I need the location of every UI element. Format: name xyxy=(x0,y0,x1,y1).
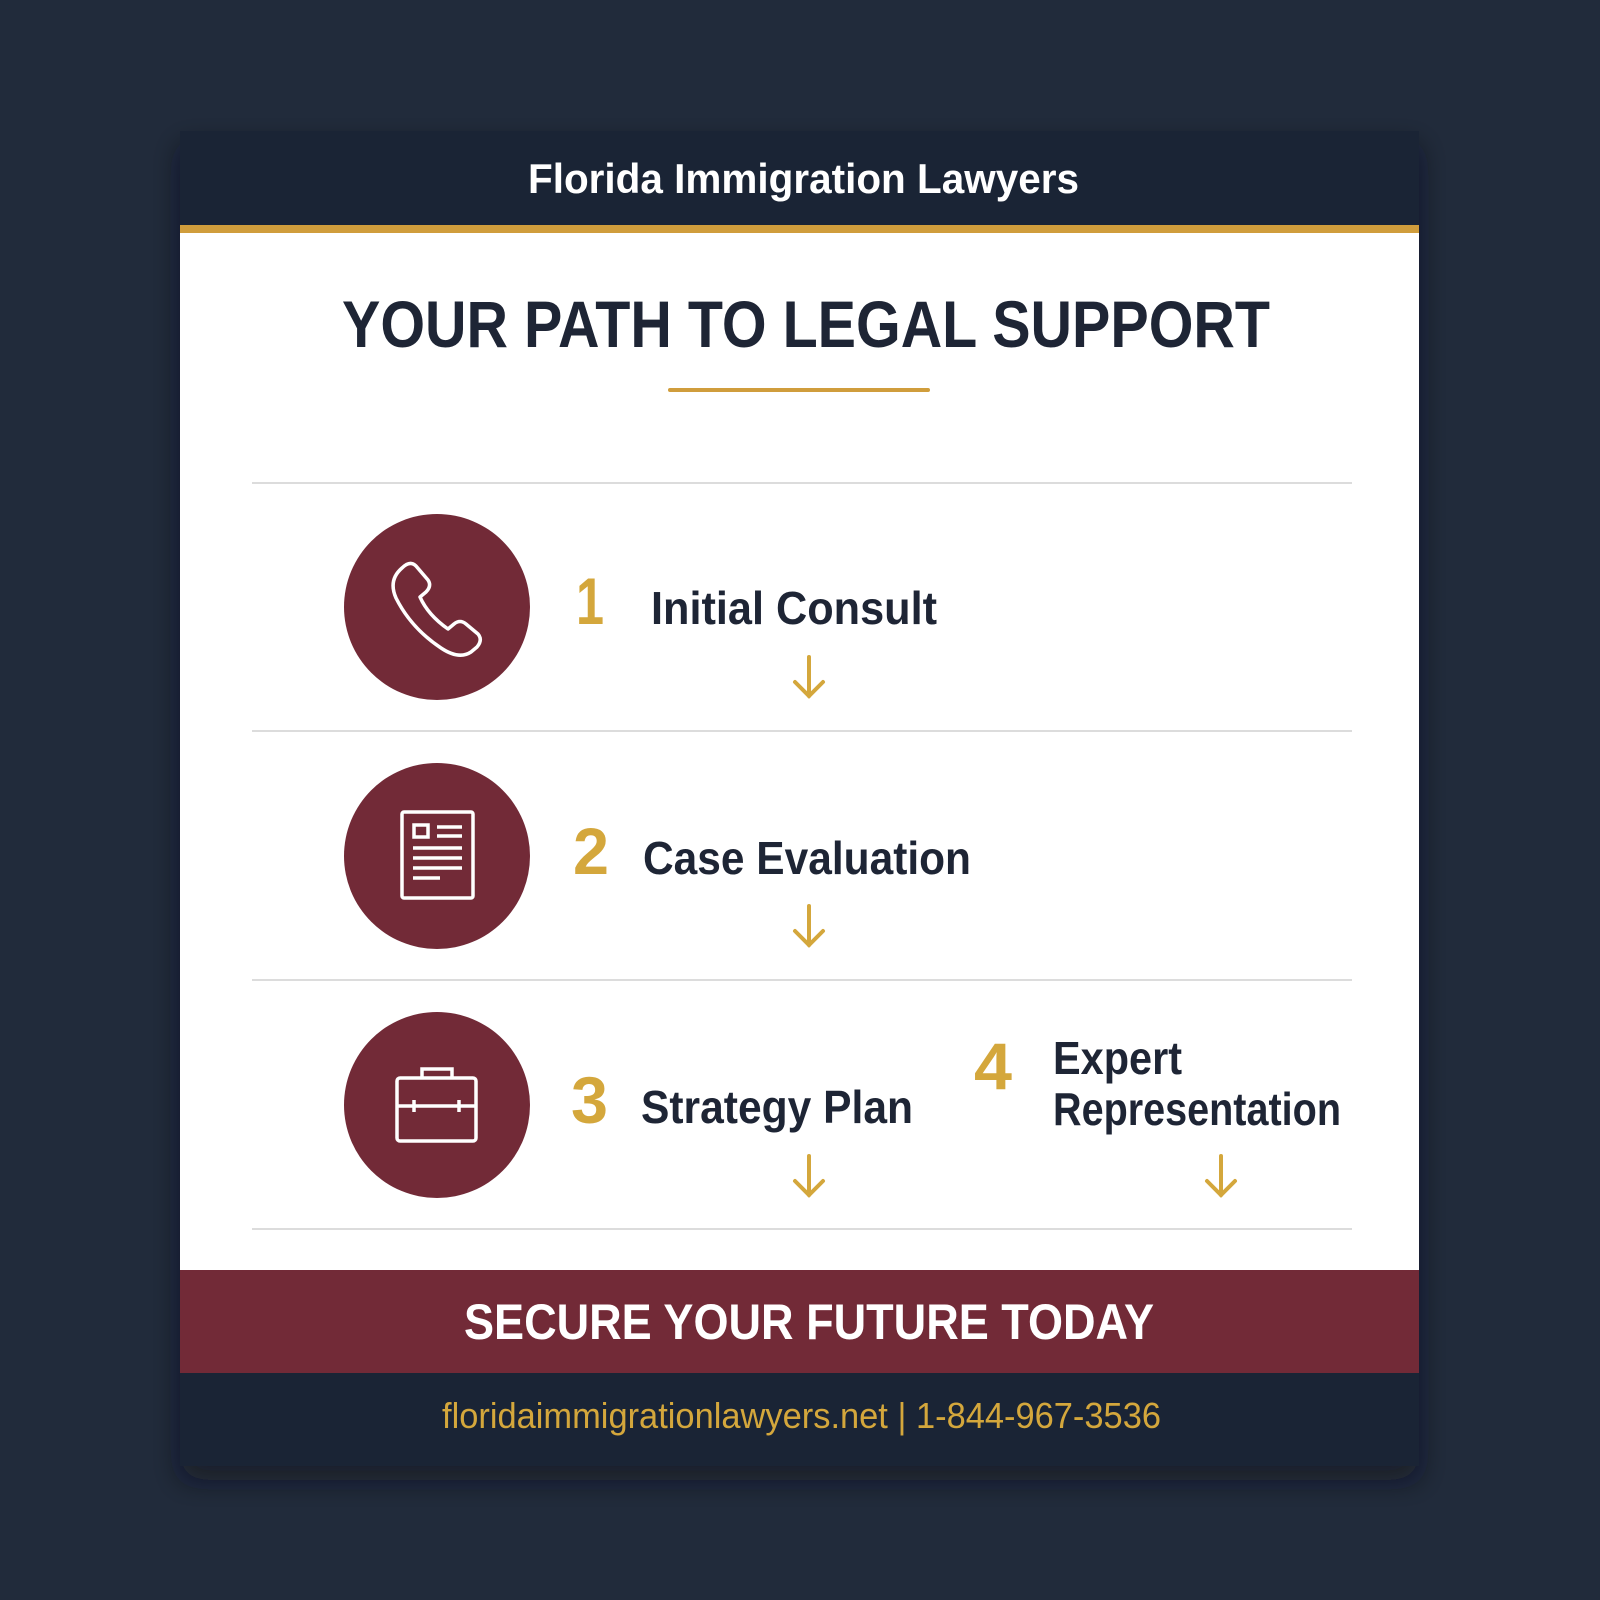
step 1 xyxy=(344,514,937,700)
icon: phone xyxy=(344,514,530,700)
label: Expert Representation: Representation xyxy=(1053,1083,1341,1135)
header title: Florida Immigration Lawyers xyxy=(528,155,1079,202)
step 2 xyxy=(344,763,971,949)
call to action band xyxy=(180,1270,1419,1373)
icon: document xyxy=(344,763,530,949)
step 3 xyxy=(344,1012,913,1198)
number 1: 1 xyxy=(576,564,604,638)
label: Expert Representation xyxy=(1053,1032,1341,1135)
label: Strategy Plan: Strategy Plan xyxy=(641,1081,913,1133)
number 4: 4 xyxy=(974,1029,1012,1103)
arrow xyxy=(795,1156,823,1195)
step 4 xyxy=(974,1029,1341,1195)
arrow xyxy=(795,657,823,696)
arrow xyxy=(1207,1156,1235,1195)
main heading: YOUR PATH TO LEGAL SUPPORT xyxy=(342,287,1270,361)
footer contact xyxy=(180,1373,1419,1466)
label: Case Evaluation: Case Evaluation xyxy=(643,832,971,884)
call to action band: SECURE YOUR FUTURE TODAY xyxy=(464,1294,1154,1350)
label: Expert Representation: Expert xyxy=(1053,1032,1182,1084)
heading underline xyxy=(668,388,930,392)
icon: briefcase xyxy=(344,1012,530,1198)
number 2: 2 xyxy=(573,814,609,888)
arrow xyxy=(795,906,823,945)
footer contact: floridaimmigrationlawyers.net | 1-844-967-3536 xyxy=(442,1395,1161,1436)
number 3: 3 xyxy=(571,1063,608,1137)
card xyxy=(180,131,1419,1466)
label: Initial Consult: Initial Consult xyxy=(651,582,937,634)
header bar xyxy=(180,131,1419,233)
